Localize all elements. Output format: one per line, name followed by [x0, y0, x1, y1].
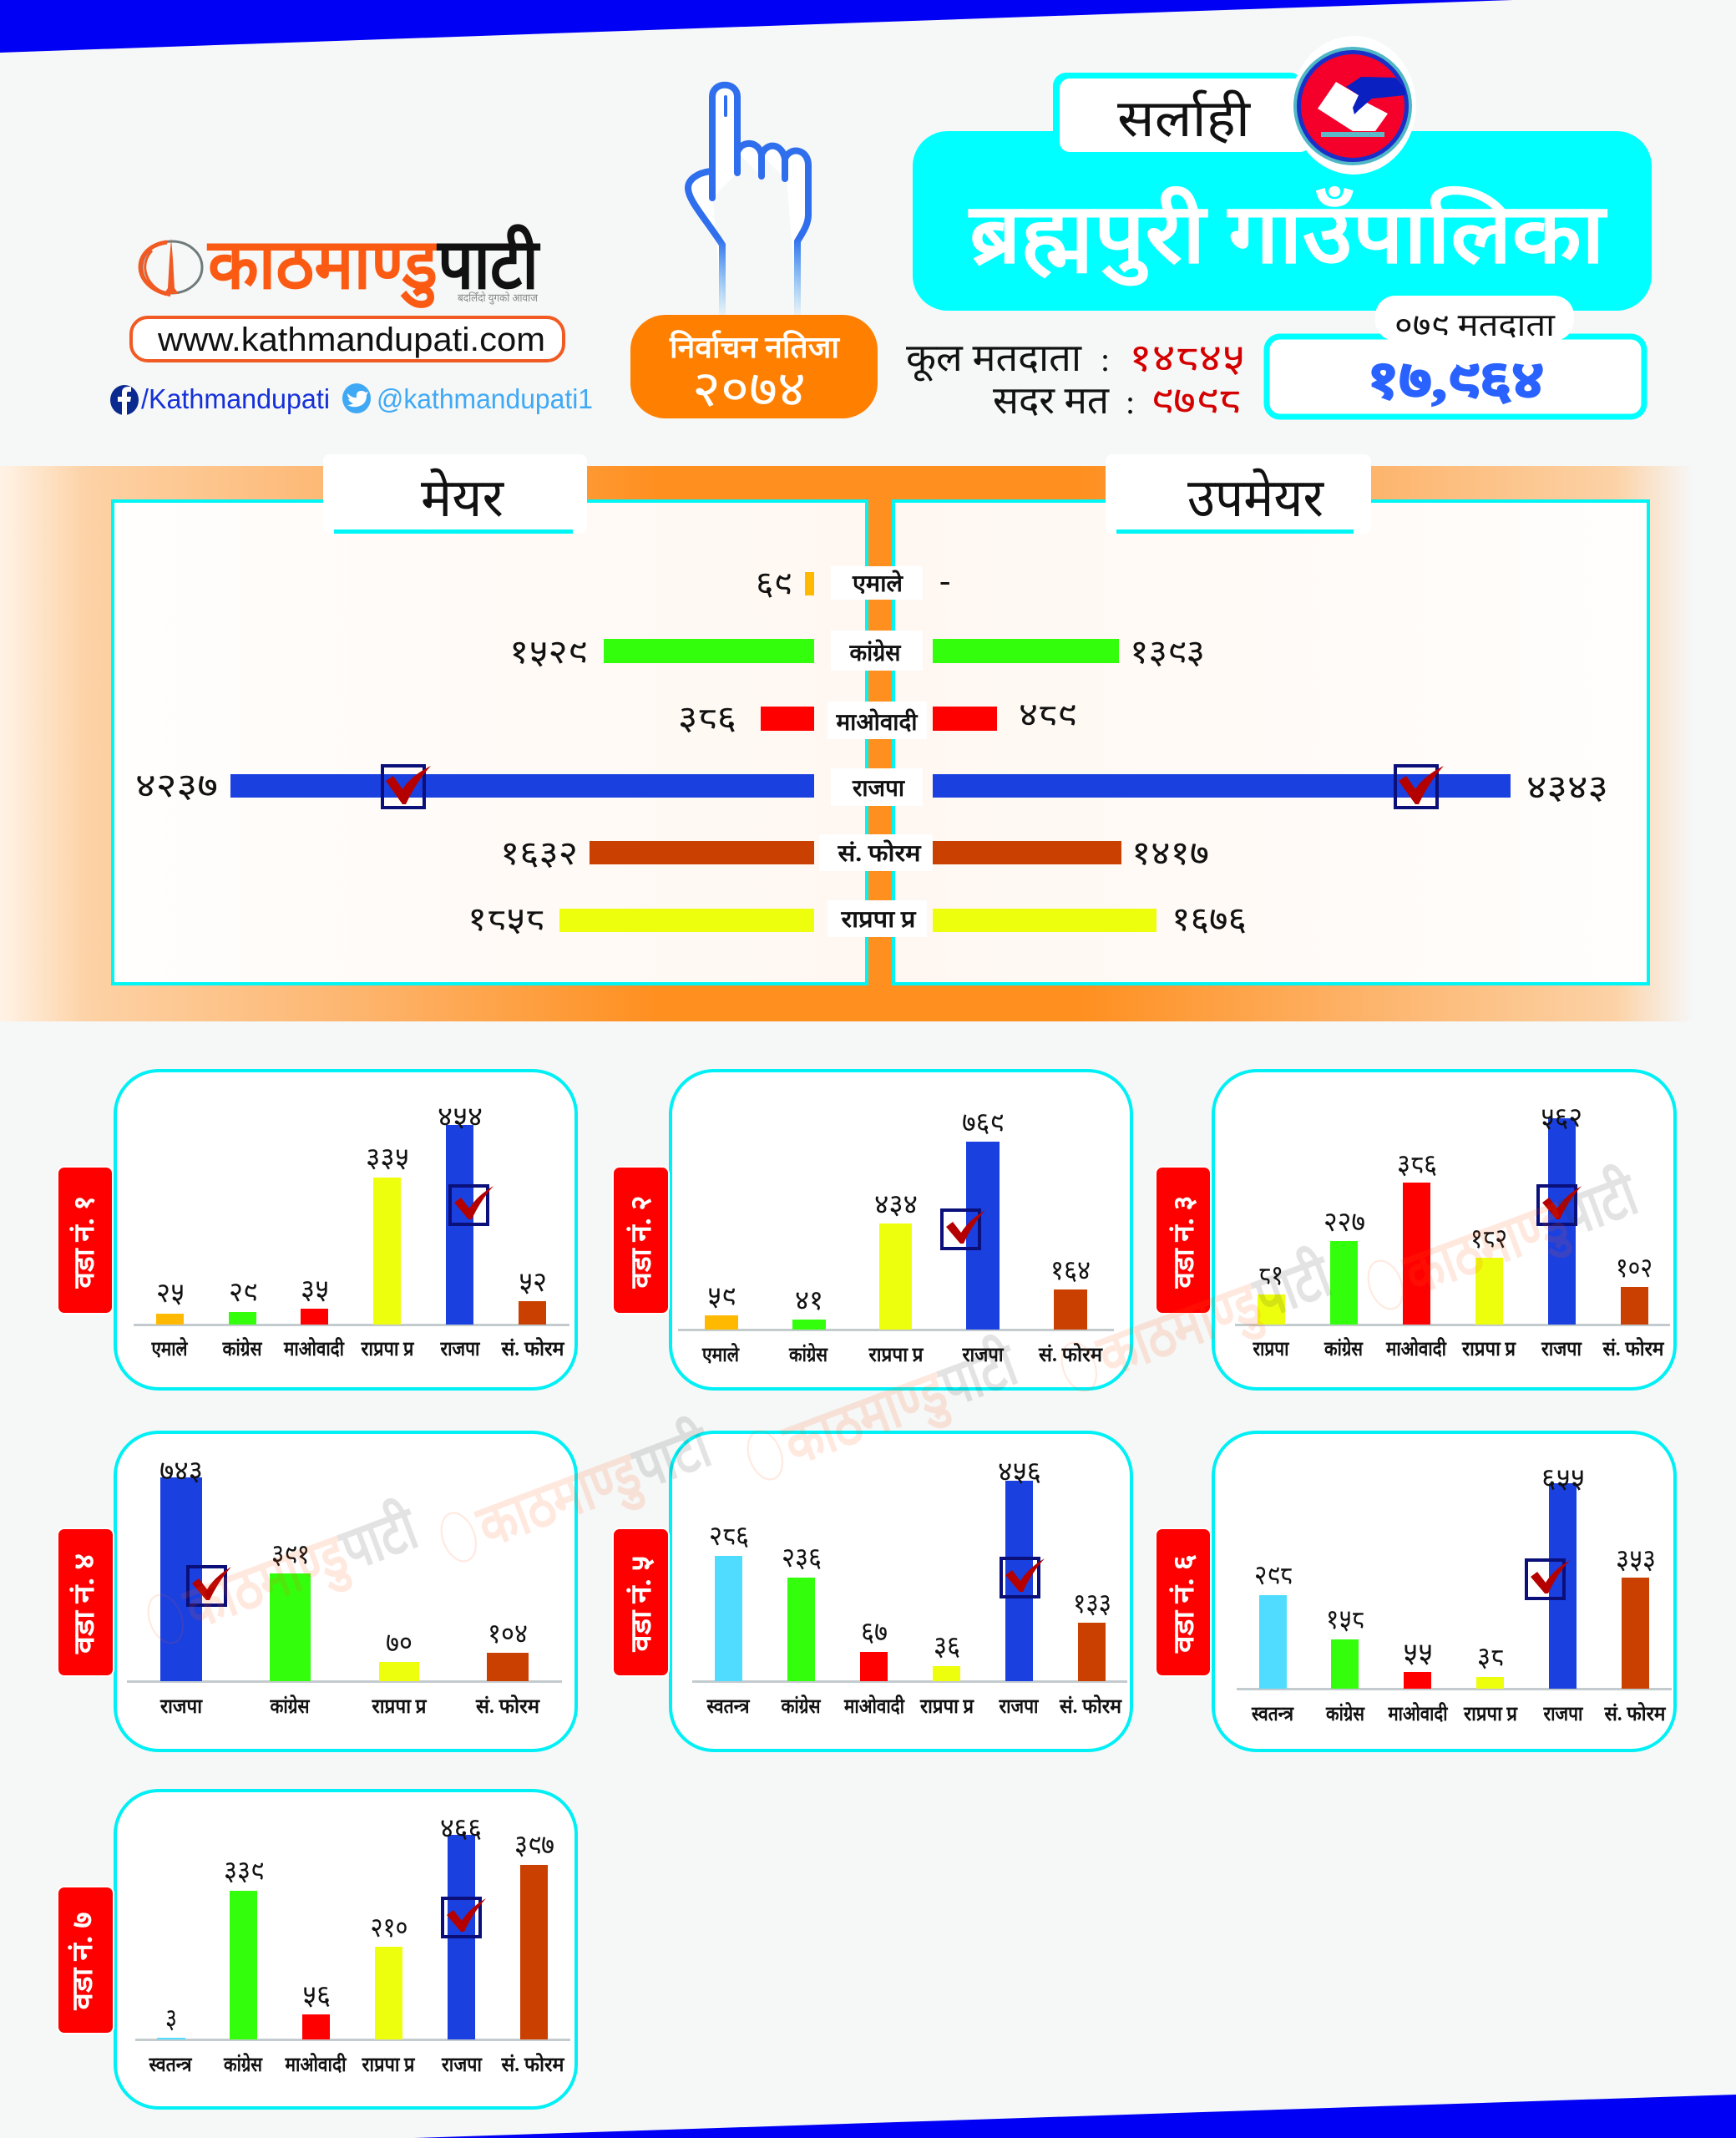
ward 6 bar chart: ६५५	[1541, 1464, 1585, 1494]
ward 6 bar chart: राजपा	[1543, 1704, 1583, 1725]
municipality name: ब्रह्मपुरी गाउँपालिका	[968, 185, 1607, 286]
mayor heading: मेयर	[421, 468, 505, 528]
ward 5 bar chart: सं. फोरम	[1059, 1695, 1123, 1718]
row: Maoist: ३८६	[678, 699, 736, 737]
badge: election result 2074	[630, 315, 878, 418]
valid votes: :	[1126, 383, 1135, 421]
ward 5 tab	[613, 1528, 669, 1676]
row: Maoist	[678, 696, 1076, 739]
ward 1 bar chart: २९	[229, 1278, 257, 1308]
ward 2 bar chart: १६४	[1050, 1256, 1091, 1286]
ward 3 bar chart: ५६२	[1541, 1103, 1582, 1133]
ward 3 bar chart: २२७	[1324, 1208, 1365, 1238]
row: RPP-P: १८५८	[468, 900, 544, 938]
icon: election commission seal	[1291, 36, 1416, 175]
ward 3 tab: वडा नं. ३	[1169, 1195, 1200, 1289]
ward 3 bar chart: माओवादी	[1385, 1337, 1447, 1360]
ward 2 bar chart: राप्रपा प्र	[868, 1345, 924, 1366]
ward 1 bar chart: ४५४	[438, 1102, 483, 1132]
panel: 2079 voter count: १७,९६४	[1367, 352, 1544, 409]
ward 3 bar chart: राजपा	[1541, 1339, 1582, 1360]
row: UML	[756, 561, 950, 602]
ward 1 bar chart: कांग्रेस	[222, 1337, 262, 1360]
ward 3 bar chart: ८१	[1258, 1261, 1283, 1291]
ward 7 bar chart: ३	[165, 2004, 177, 2034]
ward 7 bar chart: ५६	[302, 1981, 331, 2011]
row: RPP-P: राप्रपा प्र	[840, 907, 917, 933]
ward 6 bar chart: राप्रपा प्र	[1463, 1704, 1518, 1725]
row: UML: ६९	[756, 565, 792, 602]
icon: facebook	[110, 385, 139, 415]
panel: orange band	[0, 466, 1736, 1021]
ward 1 bar chart: माओवादी	[283, 1337, 345, 1360]
ward 3 bar chart	[1235, 1103, 1670, 1360]
ward 3 bar chart: सं. फोरम	[1602, 1337, 1665, 1360]
row: Maoist: ४८९	[1019, 696, 1076, 733]
ward 5 bar chart	[692, 1457, 1127, 1718]
row: RJP	[135, 766, 1608, 808]
watermarks: पाटी	[1244, 1240, 1341, 1332]
ward 5 bar chart: ४५६	[998, 1457, 1041, 1487]
watermarks: पाटी	[624, 1411, 721, 1502]
ward 1 bar chart: ३३५	[366, 1143, 409, 1173]
district tab	[1053, 73, 1310, 152]
ward 3 bar chart: राप्रपा	[1253, 1339, 1289, 1360]
ward 1 tab	[58, 1167, 113, 1314]
watermarks: काठमाण्डु	[774, 1357, 959, 1482]
district tab: सर्लाही	[1117, 89, 1251, 148]
ward 6 bar chart: २९८	[1254, 1561, 1293, 1591]
ward 5 bar chart: राप्रपा प्र	[919, 1696, 974, 1718]
ward 6 bar chart: ३५३	[1616, 1545, 1656, 1575]
panel: ward 4	[58, 1432, 576, 1750]
ward 7 bar chart: सं. फोरम	[501, 2053, 565, 2076]
ward 2 tab: वडा नं. २	[626, 1195, 657, 1289]
panel: ward 1	[58, 1071, 576, 1389]
ward 7 bar chart: २१०	[371, 1913, 407, 1943]
ward 7 bar chart: कांग्रेस	[223, 2053, 263, 2076]
ward 6 tab: वडा नं. ६	[1169, 1554, 1200, 1654]
row: Forum: १४१७	[1131, 834, 1209, 872]
ward 5 bar chart: १३३	[1073, 1589, 1111, 1619]
icon: winner check	[1526, 1560, 1570, 1598]
row: RPP-P: १६७६	[1172, 900, 1247, 938]
ward 7 tab	[58, 1887, 114, 2034]
social: twitter: @kathmandupati1	[377, 383, 593, 414]
total voters	[906, 337, 1245, 382]
ward 3 bar chart: ३८६	[1397, 1150, 1437, 1180]
ward 6 bar chart: कांग्रेस	[1325, 1702, 1365, 1725]
ward 7 bar chart	[135, 1814, 570, 2076]
ward 4 bar chart: ७४३	[159, 1457, 203, 1487]
ward 4 bar chart: कांग्रेस	[270, 1695, 310, 1718]
ward 4 bar chart: सं. फोरम	[475, 1695, 541, 1718]
top blue band	[0, 0, 1513, 53]
mayor panel	[113, 501, 867, 984]
watermarks: काठमाण्डु	[1394, 1187, 1579, 1312]
total voters: कूल मतदाता	[906, 337, 1082, 382]
row: UML: एमाले	[852, 570, 903, 597]
ward 3 tab	[1156, 1167, 1211, 1314]
ward 4 bar chart: १०४	[488, 1619, 528, 1649]
watermarks: काठमाण्डु	[468, 1439, 652, 1564]
ward 2 tab	[613, 1167, 669, 1314]
ward 1 bar chart: एमाले	[151, 1337, 189, 1360]
watermarks: पाटी	[930, 1329, 1027, 1421]
ward 4 bar chart: ३९१	[271, 1540, 310, 1570]
ward 5 bar chart: स्वतन्त्र	[706, 1696, 751, 1718]
row: UML: -	[939, 561, 950, 599]
row: Forum	[500, 834, 1209, 872]
ward 2 bar chart	[678, 1108, 1114, 1366]
valid votes: ९७९८	[1151, 379, 1241, 422]
ward 5 bar chart: ६७	[861, 1618, 888, 1648]
ward 6 bar chart: ३८	[1477, 1643, 1504, 1673]
ward 3 bar chart: १०२	[1616, 1254, 1652, 1284]
panel: ward 6	[1156, 1432, 1675, 1750]
panel: 2079 voter count: ०७९ मतदाता	[1394, 308, 1556, 343]
badge: election result 2074: २०७४	[692, 362, 806, 417]
ward 4 bar chart: ७०	[386, 1629, 412, 1659]
panel: ward 7	[58, 1791, 576, 2108]
row: Congress: १३९३	[1130, 633, 1205, 671]
panel: municipality title	[913, 36, 1652, 311]
ward 4 bar chart: राजपा	[159, 1696, 203, 1718]
panel: ward 2	[613, 1071, 1131, 1389]
watermarks: पाटी	[1551, 1158, 1647, 1250]
logo tagline: बदलिँदो युगको आवाज	[458, 291, 538, 305]
valid votes: सदर मत	[993, 379, 1110, 422]
ward 5 tab: वडा नं. ५	[626, 1555, 657, 1653]
ward 7 bar chart: ३३९	[224, 1857, 264, 1887]
logo: Kathmandupati	[140, 224, 541, 308]
watermarks	[139, 1158, 1649, 1659]
ward 6 bar chart: माओवादी	[1388, 1702, 1448, 1725]
icon: winner check	[188, 1567, 231, 1605]
ward 7 bar chart: राप्रपा प्र	[362, 2054, 416, 2076]
panel: mayor and deputy results	[113, 454, 1648, 984]
ward 5 bar chart: २८६	[709, 1522, 749, 1552]
deputy mayor heading: उपमेयर	[1187, 468, 1325, 528]
ward 6 bar chart: स्वतन्त्र	[1251, 1704, 1295, 1725]
ward 5 bar chart: राजपा	[999, 1696, 1039, 1718]
ward 1 bar chart	[134, 1102, 569, 1360]
ward 1 bar chart: ३५	[301, 1275, 329, 1305]
icon: winner check	[450, 1186, 493, 1224]
bottom blue band	[414, 2095, 1736, 2138]
icon: winner check mayor	[382, 766, 431, 808]
watermarks: काठमाण्डु	[175, 1521, 359, 1646]
row: Congress	[509, 631, 1205, 671]
row: Maoist: माओवादी	[836, 708, 919, 736]
ward 1 bar chart: राप्रपा प्र	[361, 1339, 415, 1360]
ward 5 bar chart: २३६	[782, 1543, 822, 1573]
icon: winner check	[1001, 1558, 1045, 1597]
badge: election result 2074: निर्वाचन नतिजा	[669, 330, 841, 364]
ward 1 tab: वडा नं. १	[69, 1195, 100, 1289]
icon: globe and tower	[140, 238, 202, 296]
ward 4 tab: वडा नं. ४	[69, 1553, 100, 1654]
icon: winner check	[942, 1210, 985, 1249]
ward 2 bar chart: ७६९	[962, 1108, 1004, 1138]
ward 5 bar chart: माओवादी	[843, 1695, 905, 1718]
row: RPP-P	[468, 900, 1247, 938]
icon: winner check	[443, 1898, 486, 1937]
panel: ward 3	[1156, 1071, 1675, 1389]
ward 1 bar chart: ५२	[519, 1268, 547, 1298]
ward 6 bar chart: १५८	[1326, 1605, 1364, 1635]
row: Congress: कांग्रेस	[849, 639, 902, 666]
ward 1 bar chart: राजपा	[440, 1339, 480, 1360]
ward 7 bar chart: माओवादी	[285, 2053, 347, 2076]
ward 4 bar chart: राप्रपा प्र	[372, 1696, 428, 1718]
ward 6 bar chart	[1237, 1464, 1672, 1725]
ward 1 bar chart: सं. फोरम	[501, 1337, 565, 1360]
mayor heading	[323, 454, 587, 534]
icon: hand with inked finger	[688, 85, 808, 313]
ward 3 bar chart: राप्रपा प्र	[1461, 1339, 1516, 1360]
total voters: १४८४५	[1129, 337, 1245, 379]
ward 7 tab: वडा नं. ७	[68, 1912, 99, 2011]
valid votes	[993, 379, 1241, 422]
ward 3 bar chart: कांग्रेस	[1324, 1337, 1364, 1360]
ward 2 bar chart: राजपा	[962, 1345, 1004, 1366]
row: RJP: ४३४३	[1526, 768, 1608, 806]
ward 6 tab	[1156, 1528, 1211, 1676]
deputy mayor heading	[1106, 454, 1371, 534]
panel: 2079 voter count	[1267, 296, 1644, 417]
ward 7 bar chart: ३९७	[514, 1831, 554, 1861]
ward 5 bar chart: ३६	[934, 1632, 960, 1662]
ward 4 tab	[58, 1528, 114, 1676]
ward 2 bar chart: एमाले	[701, 1343, 741, 1366]
row: Forum: १६३२	[500, 834, 578, 872]
watermarks: पाटी	[331, 1492, 428, 1584]
logo wordmark black: पाटी	[436, 224, 541, 303]
ward 2 bar chart: सं. फोरम	[1038, 1343, 1104, 1366]
ward 4 bar chart	[127, 1457, 562, 1718]
row: Congress: १५२९	[509, 633, 587, 671]
icon: winner check	[1538, 1186, 1582, 1224]
ward 2 bar chart: कांग्रेस	[788, 1343, 828, 1366]
row: Forum: सं. फोरम	[837, 839, 922, 867]
ward 7 bar chart: स्वतन्त्र	[149, 2054, 193, 2076]
ward 3 bar chart: १८२	[1470, 1224, 1507, 1254]
icon: twitter	[342, 383, 371, 413]
ward 6 bar chart: सं. फोरम	[1604, 1702, 1667, 1725]
panel: ward 5	[613, 1432, 1131, 1750]
watermarks: काठमाण्डु	[1088, 1269, 1273, 1394]
icon: winner check deputy	[1395, 766, 1444, 808]
social: facebook: /Kathmandupati	[141, 383, 330, 414]
logo wordmark orange: काठमाण्डु	[206, 225, 440, 308]
ward 5 bar chart: कांग्रेस	[781, 1695, 821, 1718]
total voters: :	[1101, 341, 1110, 378]
website box: www.kathmandupati.com	[157, 322, 545, 358]
row: RJP: ४२३७	[135, 767, 218, 804]
ward 7 bar chart: राजपा	[441, 2054, 483, 2076]
ward 2 bar chart: ४३४	[874, 1190, 918, 1220]
ward 6 bar chart: ५५	[1403, 1639, 1433, 1669]
ward 1 bar chart: २५	[156, 1279, 185, 1309]
ward 7 bar chart: ४६६	[440, 1814, 482, 1844]
ward 2 bar chart: ५९	[707, 1282, 736, 1312]
row: RJP: राजपा	[852, 776, 906, 802]
ward 2 bar chart: ४१	[795, 1286, 823, 1316]
deputy mayor panel	[893, 501, 1648, 984]
